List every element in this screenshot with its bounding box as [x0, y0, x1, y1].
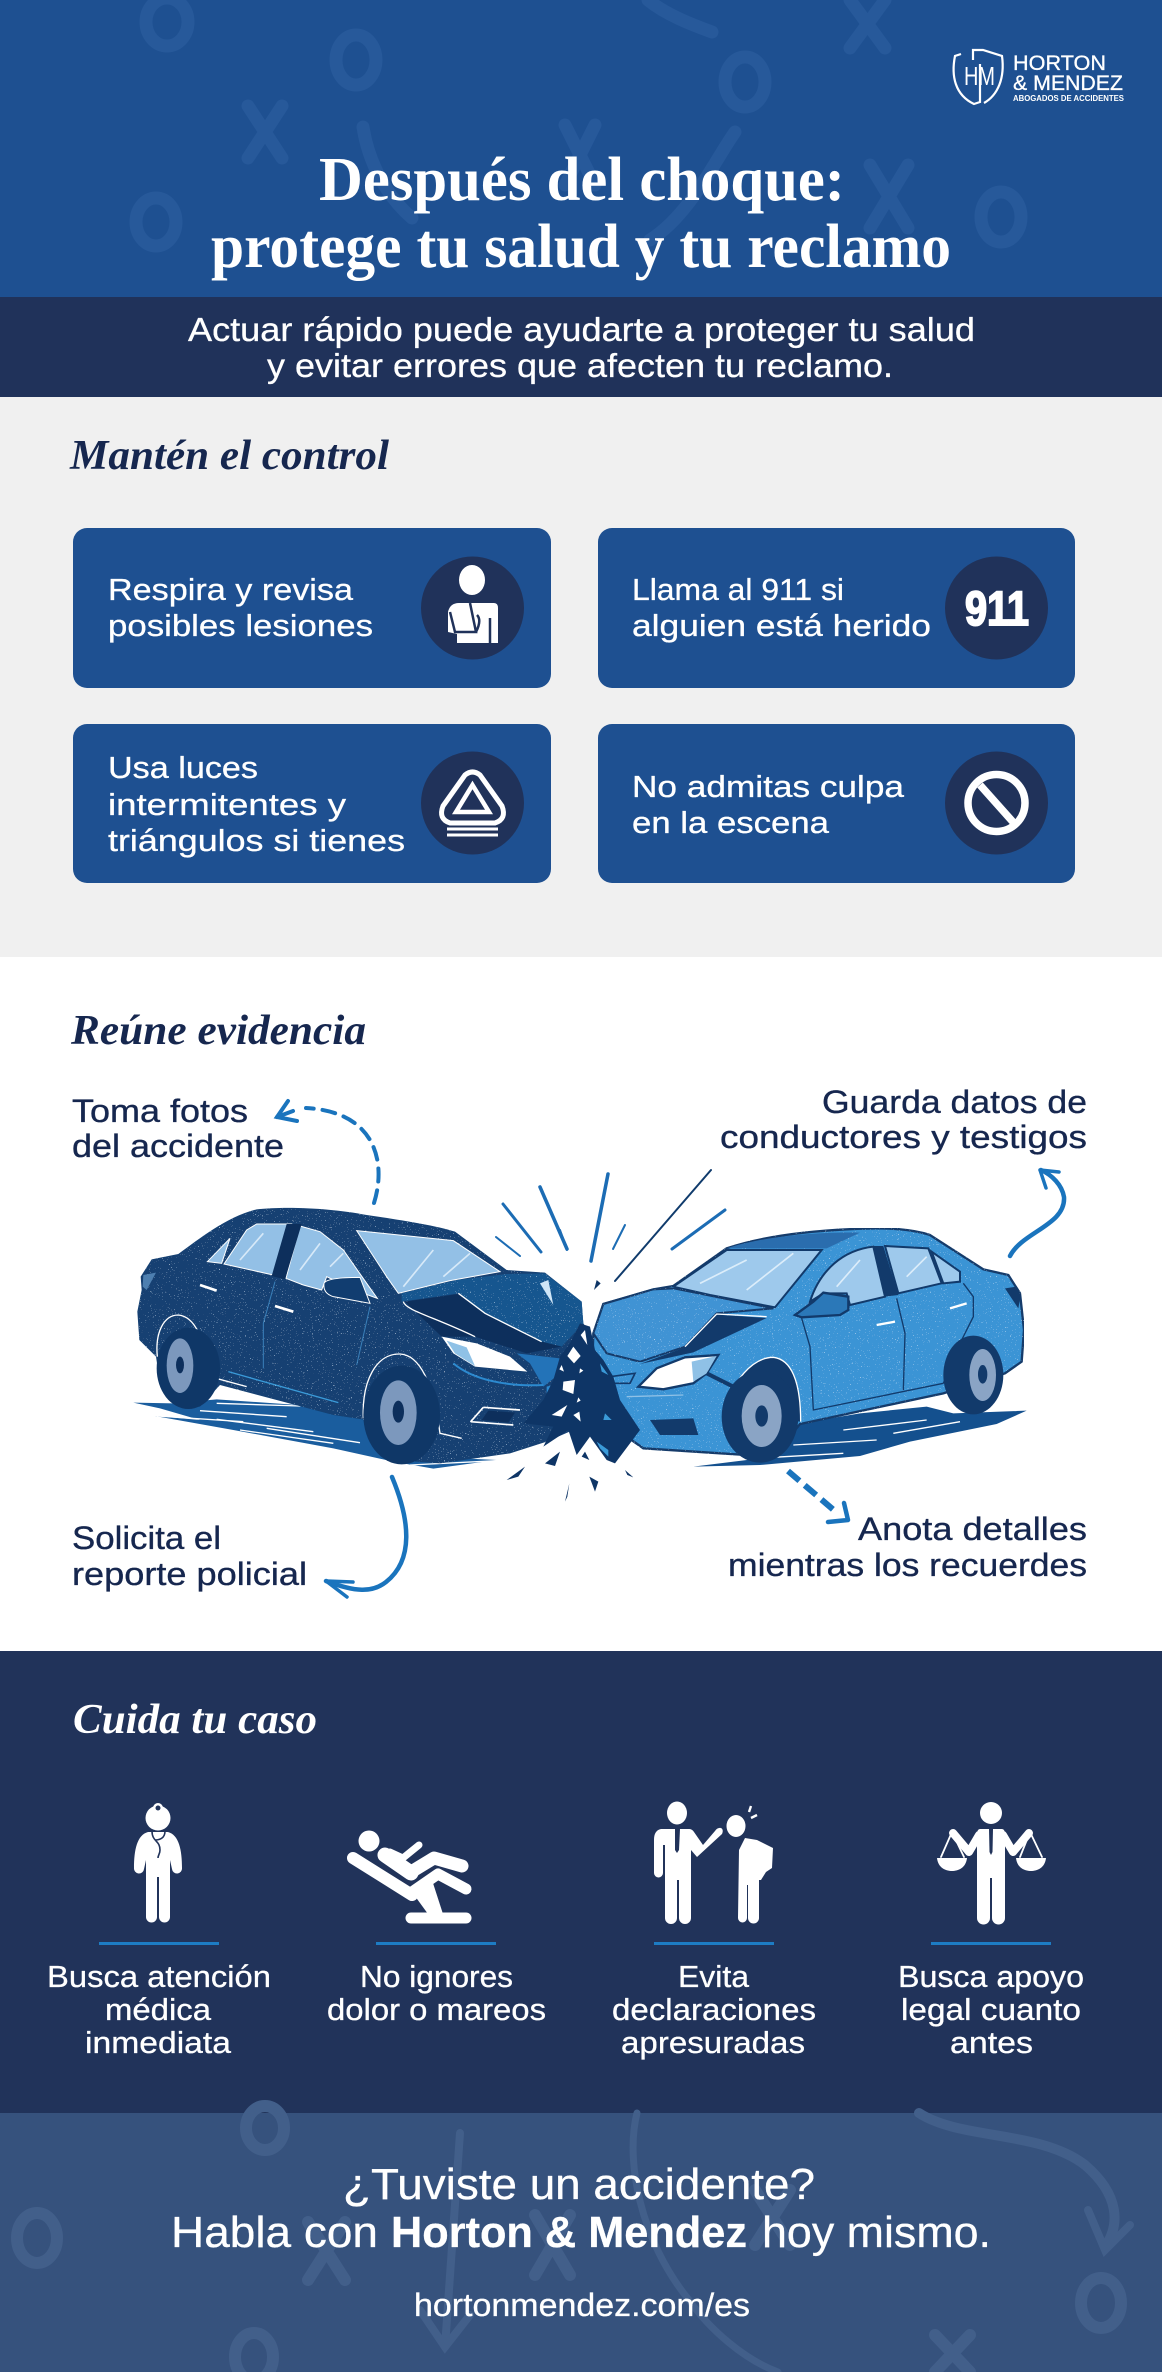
logo wordmark second line: & MENDEZ: [1013, 72, 1123, 95]
windows: [207, 1224, 500, 1298]
text: [612, 1959, 816, 2060]
label: fotos: [72, 1093, 284, 1164]
logo wordmark: HORTON: [1013, 52, 1106, 75]
panel: mantén el control: [0, 397, 1162, 957]
title: protege tu salud y tu reclamo: [211, 213, 951, 281]
blue car: [592, 1228, 1027, 1467]
panel: header: [0, 0, 1162, 297]
icon: injured person: [448, 565, 498, 643]
cta text: hoy mismo.: [762, 2208, 991, 2257]
rule: [376, 1942, 496, 1945]
card: lesiones: posibles lesiones: [108, 608, 373, 643]
icon: 911: 911: [965, 583, 1029, 636]
label: datos: [720, 1084, 1087, 1155]
text: inmediata: [85, 2025, 232, 2060]
cta text: Habla con: [171, 2208, 378, 2257]
card: culpa: en la escena: [632, 805, 830, 840]
impact burst: [507, 1280, 640, 1502]
label: fotos: Toma fotos: [72, 1093, 248, 1129]
label: reporte: reporte policial: [72, 1556, 307, 1592]
arrow: reporte: [326, 1477, 406, 1597]
card: luces: Usa luces: [108, 750, 258, 785]
body lines: [157, 1282, 462, 1438]
text: [327, 1959, 546, 2027]
card: lesiones: [73, 528, 551, 688]
card: culpa: No admitas culpa: [632, 769, 905, 804]
label: datos: conductores y testigos: [720, 1119, 1087, 1155]
icon: warning triangle: [442, 772, 503, 835]
panel: call to action: [0, 2106, 1162, 2372]
car body: [137, 1208, 590, 1463]
text: [47, 1959, 271, 2060]
text: médica: [105, 1992, 212, 2027]
car body: [592, 1228, 1024, 1457]
logo: [954, 50, 1125, 104]
icon: doctor: [134, 1803, 182, 1923]
windows: [673, 1246, 960, 1307]
title: Después del choque:: [319, 146, 845, 214]
sparks: [496, 1170, 725, 1281]
card: luces: triángulos si tienes: [108, 823, 405, 858]
subtitle text: Actuar rápido puede ayudarte a proteger tu salud: [188, 311, 975, 348]
road shadow: [693, 1407, 1027, 1467]
heading: Reúne evidencia: [70, 1008, 366, 1054]
panel: subtitle band: [0, 297, 1162, 397]
text: Busca atención: [47, 1959, 271, 1994]
dark car: [133, 1208, 590, 1469]
label: reporte: Solicita el: [72, 1520, 221, 1556]
label: detalles: mientras los recuerdes: [728, 1547, 1087, 1583]
text: [898, 1959, 1084, 2060]
card: 911: [598, 528, 1075, 688]
arrow: fotos: [277, 1101, 379, 1203]
text: dolor o mareos: [327, 1992, 546, 2027]
heading: Cuida tu caso: [73, 1697, 317, 1743]
rule: [99, 1942, 219, 1945]
wheels: [157, 1328, 440, 1464]
logo tagline: ABOGADOS DE ACCIDENTES: [1013, 94, 1125, 103]
rule: [654, 1942, 774, 1945]
card: 911: Llama al 911 si: [632, 572, 844, 607]
illustration: crashed cars: [133, 1170, 1027, 1502]
panel: reúne evidencia: [0, 957, 1162, 1651]
hood: [593, 1288, 773, 1362]
cta text: [171, 2160, 991, 2257]
subtitle text: y evitar errores que afecten tu reclamo.: [267, 347, 893, 384]
text: antes: [950, 2025, 1033, 2060]
label: detalles: Anota detalles: [858, 1511, 1087, 1547]
cta text: Horton & Mendez: [391, 2208, 747, 2257]
column: apoyo legal: [898, 1802, 1084, 2060]
icon: reclined patient: [353, 1830, 466, 1918]
grille and fog lamp: [603, 1373, 698, 1435]
card: luces: [73, 724, 551, 883]
icon: two people talking: [654, 1802, 773, 1924]
arrow: detalles: [788, 1471, 848, 1522]
card: luces: intermitentes y: [108, 787, 347, 822]
column: dolor: [327, 1830, 546, 2027]
roof shade: [727, 1233, 860, 1248]
subtitle text: [188, 311, 975, 384]
card: culpa: [598, 724, 1075, 883]
text: declaraciones: [612, 1992, 816, 2027]
text: No ignores: [360, 1959, 513, 1994]
headlight: [442, 1337, 527, 1372]
column: atención médica: [47, 1803, 271, 2060]
hood: [402, 1273, 583, 1347]
text: Busca apoyo: [898, 1959, 1084, 1994]
website: hortonmendez.com/es: [414, 2287, 750, 2323]
panel: cuida tu caso: [0, 1651, 1162, 2113]
card: lesiones: Respira y revisa: [108, 572, 354, 607]
grille and fog lamp: [453, 1353, 560, 1425]
icon: prohibited: [968, 774, 1025, 832]
logo shield: [954, 50, 1003, 104]
mirror: [795, 1293, 848, 1317]
arrow: datos: [1010, 1170, 1064, 1256]
icon: person with scales: [937, 1802, 1046, 1925]
road shadow: [133, 1399, 497, 1469]
label: datos: Guarda datos de: [822, 1084, 1087, 1120]
label: reporte: [72, 1520, 307, 1592]
rule: [931, 1942, 1051, 1945]
title: [211, 146, 951, 281]
headlight: [638, 1355, 733, 1389]
text: Evita: [678, 1959, 750, 1994]
body lines: [802, 1283, 973, 1410]
heading: Mantén el control: [69, 433, 389, 479]
wheels: [722, 1336, 1003, 1463]
cta text: ¿Tuviste un accidente?: [343, 2160, 815, 2209]
text: apresuradas: [621, 2025, 805, 2060]
mirror: [324, 1277, 370, 1303]
label: detalles: [728, 1511, 1087, 1583]
label: fotos: del accidente: [72, 1128, 284, 1164]
text: legal cuanto: [901, 1992, 1081, 2027]
card: 911: alguien está herido: [632, 608, 931, 643]
column: declaraciones: [612, 1802, 816, 2060]
logo monogram: HM: [964, 61, 995, 91]
